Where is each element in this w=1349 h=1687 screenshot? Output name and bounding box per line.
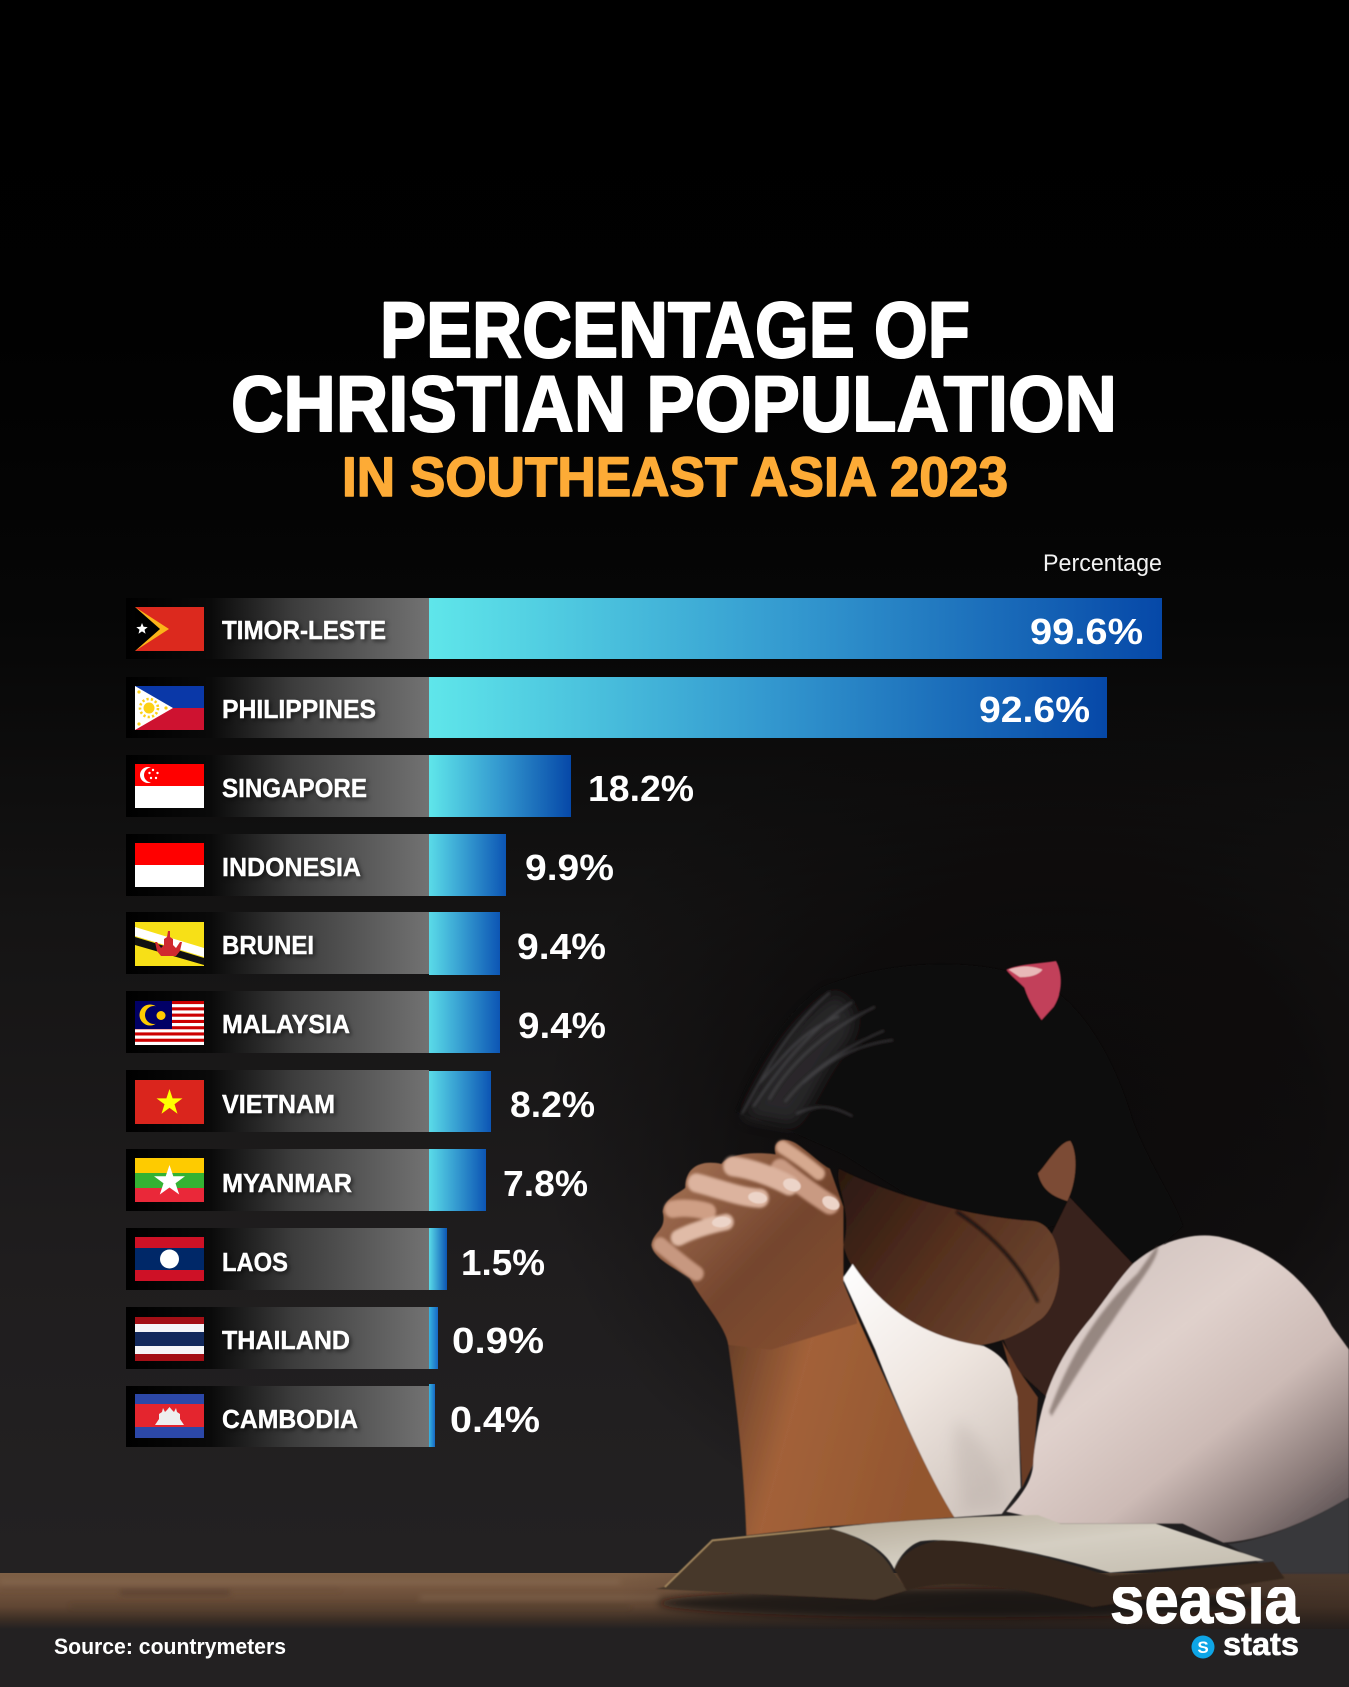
row: Vietnam (126, 1070, 595, 1132)
source note: Source: countrymeters (54, 1634, 286, 1659)
bar chart (126, 598, 1162, 1447)
ear (1038, 1141, 1076, 1201)
photo: woman praying over an open book (651, 961, 1349, 1617)
wooden table (0, 1573, 1349, 1629)
icon: S badge: S (1197, 1638, 1209, 1657)
row: Timor-Leste (126, 598, 1162, 659)
sleeve (1006, 1235, 1349, 1543)
row: Singapore: 18.2% (588, 768, 694, 809)
row: Philippines (126, 677, 1107, 738)
row: Cambodia: 0.4% (450, 1399, 540, 1440)
row: Brunei: BRUNEI (222, 930, 314, 960)
row: Myanmar (126, 1149, 588, 1211)
row: Cambodia (126, 1384, 540, 1447)
icon: S badge (1192, 1636, 1214, 1658)
row: Indonesia: INDONESIA (222, 852, 361, 882)
title line 1: PERCENTAGE OF (380, 285, 970, 374)
open book (656, 1515, 1284, 1607)
row: Brunei: 9.4% (517, 926, 606, 967)
row: Indonesia (126, 834, 614, 896)
title line 2: CHRISTIAN POPULATION (231, 359, 1117, 448)
face (838, 1169, 1059, 1346)
row: Malaysia (126, 991, 606, 1053)
hair (735, 964, 1183, 1269)
row: Singapore: SINGAPORE (222, 773, 367, 803)
blouse (843, 1264, 1021, 1517)
stats wordmark: stats (1223, 1626, 1299, 1662)
row: Timor-Leste: TIMOR-LESTE (222, 615, 386, 645)
row: Indonesia: 9.9% (525, 847, 614, 888)
row: Malaysia: 9.4% (518, 1005, 606, 1046)
row: Vietnam: 8.2% (510, 1084, 595, 1125)
row: Singapore (126, 755, 694, 817)
subtitle: IN SOUTHEAST ASIA 2023 (342, 445, 1008, 508)
hair strands over face (957, 1212, 1038, 1302)
title (231, 285, 1117, 508)
back shadow (1228, 1497, 1349, 1574)
row: Philippines: 92.6% (979, 689, 1090, 730)
row: Thailand: 0.9% (452, 1320, 544, 1361)
row: Malaysia: MALAYSIA (222, 1009, 350, 1039)
row: Philippines: PHILIPPINES (222, 694, 376, 724)
row: Thailand: THAILAND (222, 1325, 350, 1355)
logo: seasia stats (1112, 1587, 1300, 1658)
table book shadow (658, 1589, 1273, 1617)
row: Brunei (126, 912, 606, 975)
clasped hands (651, 1140, 857, 1350)
row: Cambodia: CAMBODIA (222, 1404, 358, 1434)
row: Myanmar: 7.8% (503, 1163, 588, 1204)
photo: dark backdrop behind woman (540, 690, 1349, 1570)
chest (1002, 1340, 1038, 1488)
row: Laos: 1.5% (461, 1242, 545, 1283)
row: Vietnam: VIETNAM (222, 1089, 335, 1119)
row: Myanmar: MYANMAR (222, 1168, 352, 1198)
hair tie (1006, 961, 1061, 1020)
row: Laos (126, 1228, 545, 1290)
row: Thailand (126, 1307, 544, 1369)
forearm (728, 1283, 954, 1536)
row: Timor-Leste: 99.6% (1030, 611, 1143, 652)
neck (1002, 1197, 1133, 1397)
column heading: Percentage (1043, 550, 1162, 577)
row: Laos: LAOS (222, 1247, 288, 1277)
wordmark: seasia (1110, 1562, 1300, 1638)
